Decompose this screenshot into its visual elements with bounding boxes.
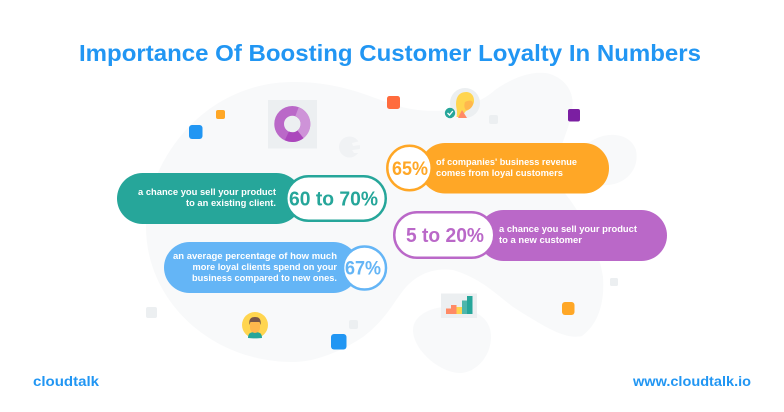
stat card: 65%: of companies' business revenue (436, 157, 577, 168)
icon: woman avatar (445, 88, 480, 118)
decorative square: red (387, 96, 400, 109)
stat card: 60 to 70%: 60 to 70% (289, 188, 378, 210)
stat card: 60 to 70%: a chance you sell your product (138, 187, 277, 198)
stat card: 65%: comes from loyal customers (436, 168, 563, 179)
icon: euro coin (339, 136, 360, 158)
stat card: 60 to 70% (117, 173, 386, 224)
icon: man avatar (242, 312, 268, 338)
icon: donut chart (268, 100, 317, 148)
stat card: 67%: 67% (345, 258, 381, 280)
decorative square: blue (189, 125, 202, 139)
decorative square: pale right (610, 278, 618, 286)
background blobs (146, 73, 637, 373)
decorative square: pale top (489, 115, 498, 124)
decorative square: blue bottom (331, 334, 346, 350)
stat card: 65% (387, 143, 609, 194)
stat card: 67%: more loyal clients spend on your (192, 262, 337, 273)
stat card: 5 to 20% (394, 210, 667, 261)
decorative square: purple (568, 109, 580, 122)
stat card: 5 to 20%: a chance you sell your product (499, 224, 638, 235)
stat card: 5 to 20%: 5 to 20% (406, 225, 484, 247)
title: Importance Of Boosting Customer Loyalty In Numbers (79, 40, 701, 66)
logo: cloudtalk: cloudtalk (33, 373, 99, 389)
decorative square: orange right (562, 302, 574, 315)
stat card: 67%: business compared to new ones. (192, 273, 337, 284)
stat card: 60 to 70%: to an existing client. (186, 198, 276, 209)
website url: www.cloudtalk.io (632, 373, 751, 389)
decorative square: pale left (146, 307, 157, 318)
stat card: 5 to 20%: to a new customer (499, 235, 582, 246)
stat card: 65%: 65% (392, 158, 428, 180)
stat card: 67%: an average percentage of how much (173, 251, 337, 262)
decorative square: pale bottom (349, 320, 358, 329)
icon: bar chart (441, 294, 477, 318)
decorative square: orange (216, 110, 225, 119)
stat card: 67% (164, 242, 386, 293)
